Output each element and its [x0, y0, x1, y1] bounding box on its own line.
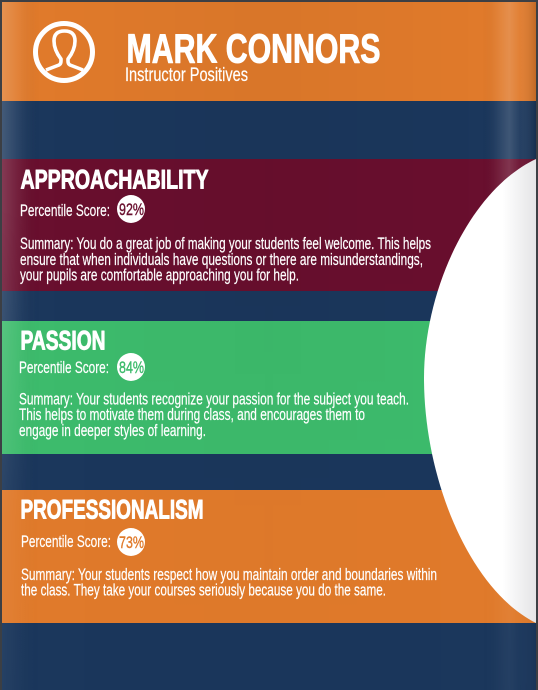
panel: passion — [19, 326, 409, 440]
white curved shape — [424, 159, 536, 623]
percentile label: Percentile Score: — [20, 202, 110, 220]
score badge: 84% — [119, 358, 144, 377]
subtitle: Instructor Positives — [125, 64, 248, 86]
score badge: 73% — [119, 533, 144, 552]
score badge — [117, 353, 145, 381]
header band — [2, 2, 536, 101]
summary text: This helps to motivate them during class, and encourages them to — [19, 406, 365, 424]
icon: person in circle — [36, 24, 92, 80]
panel background: approachability — [2, 159, 536, 291]
panel background: passion — [2, 321, 536, 454]
heading: APPROACHABILITY — [20, 164, 208, 194]
summary text: the class. They take your courses seriously because you do the same. — [21, 582, 386, 600]
summary text: engage in deeper styles of learning. — [19, 422, 206, 440]
heading: PROFESSIONALISM — [20, 494, 204, 524]
score badge — [117, 195, 145, 223]
score badge — [117, 528, 145, 556]
percentile label: Percentile Score: — [19, 359, 109, 377]
panel: approachability — [20, 164, 431, 284]
summary text — [21, 566, 437, 600]
panel: professionalism — [20, 494, 437, 600]
summary text — [20, 235, 431, 284]
summary text: your pupils are comfortable approaching you for help. — [20, 266, 299, 284]
summary text — [19, 390, 409, 440]
panel background: professionalism — [2, 490, 536, 623]
percentile label: Percentile Score: — [21, 533, 111, 551]
title: MARK CONNORS — [126, 26, 380, 72]
score badge: 92% — [119, 200, 144, 219]
heading: PASSION — [20, 326, 106, 356]
